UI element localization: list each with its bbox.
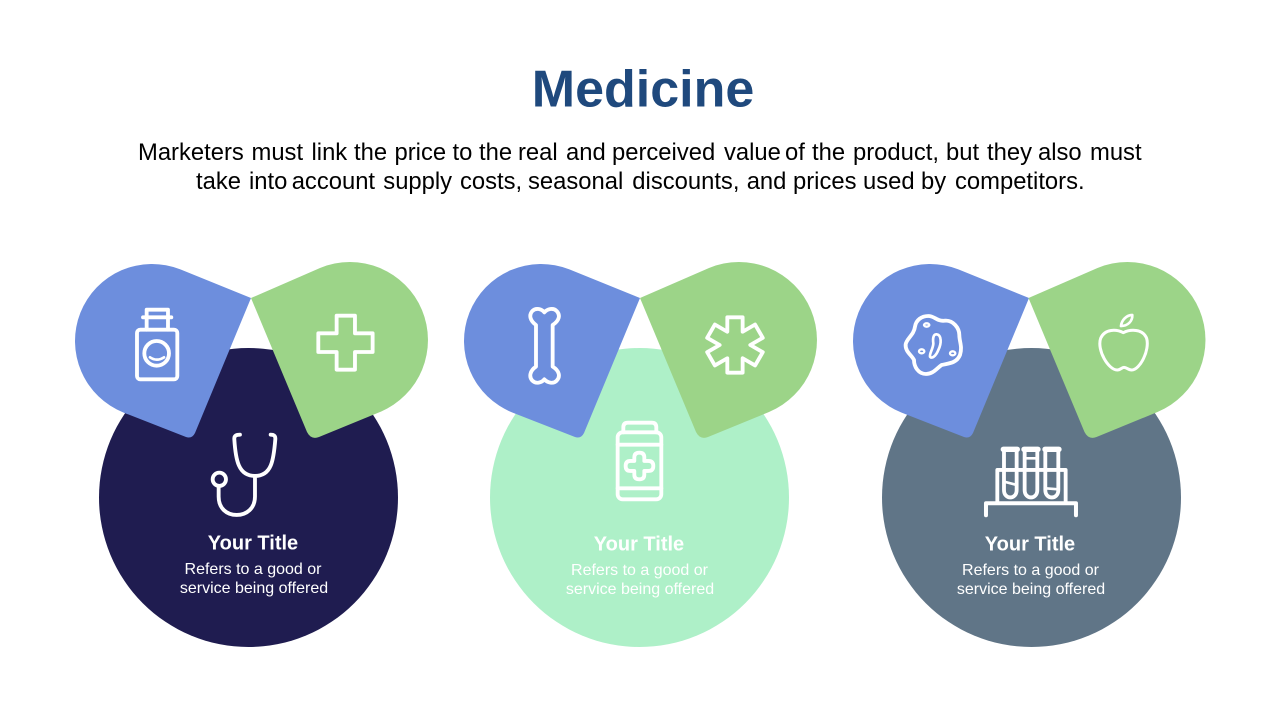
main circle — [882, 348, 1181, 647]
intro text: the — [479, 139, 512, 166]
intro text: used — [863, 168, 915, 195]
icon: bone — [530, 309, 559, 383]
card description — [566, 562, 714, 598]
intro text: perceived — [612, 139, 715, 166]
icon: stethoscope — [213, 435, 275, 515]
green petal — [640, 262, 817, 438]
icon: germ — [906, 316, 961, 374]
intro text: by — [921, 168, 946, 195]
green petal — [1028, 262, 1205, 438]
intro text: the — [354, 139, 387, 166]
icon: medicine bottle — [137, 310, 177, 379]
intro text: product, — [853, 139, 939, 166]
blue petal — [75, 264, 251, 438]
intro text: price — [394, 139, 446, 166]
icon: test tubes — [986, 449, 1076, 515]
icon: cross — [318, 316, 373, 370]
title: Medicine — [532, 60, 754, 118]
intro text: and — [566, 139, 606, 166]
intro text: take — [196, 168, 241, 195]
intro text: to — [452, 139, 472, 166]
icon: apple — [1100, 315, 1147, 370]
intro text: prices — [793, 168, 857, 195]
intro text: supply — [383, 168, 452, 195]
card description: Refers to a good or — [962, 562, 1100, 579]
intro text: the — [812, 139, 845, 166]
card description: Refers to a good or — [571, 562, 709, 579]
card description — [957, 562, 1105, 598]
blue petal — [464, 264, 640, 438]
intro text: they — [987, 139, 1032, 166]
intro text: into — [249, 168, 287, 195]
intro text: value — [724, 139, 781, 166]
intro text: and — [747, 168, 786, 195]
intro text: must — [1090, 139, 1142, 166]
icon: medicine jar — [618, 423, 661, 499]
card description: service being offered — [957, 581, 1105, 598]
intro text: must — [252, 139, 303, 166]
intro text: discounts, — [632, 168, 739, 195]
icon: star of life — [707, 317, 763, 373]
card description: service being offered — [566, 581, 714, 598]
intro text: seasonal — [528, 168, 623, 195]
panel: stethoscope group — [75, 262, 428, 647]
intro text: but — [946, 139, 979, 166]
intro text — [138, 139, 1142, 195]
panel: test tubes group — [853, 262, 1205, 647]
card title: Your Title — [208, 532, 298, 554]
card title: Your Title — [594, 534, 684, 556]
panel: medicine jar group — [464, 262, 817, 647]
intro text: real — [518, 139, 558, 166]
blue petal — [853, 264, 1029, 438]
intro text: also — [1038, 139, 1082, 166]
intro text: link — [312, 139, 347, 166]
intro text: competitors. — [955, 168, 1085, 195]
green petal — [251, 262, 428, 438]
card description — [180, 561, 328, 597]
card title: Your Title — [985, 534, 1075, 556]
card description: service being offered — [180, 580, 328, 597]
intro text: account — [292, 168, 375, 195]
card description: Refers to a good or — [185, 561, 322, 578]
intro text: costs, — [460, 168, 522, 195]
intro text: of — [785, 139, 805, 166]
main circle — [99, 348, 398, 647]
main circle — [490, 348, 789, 647]
intro text: Marketers — [138, 139, 244, 166]
